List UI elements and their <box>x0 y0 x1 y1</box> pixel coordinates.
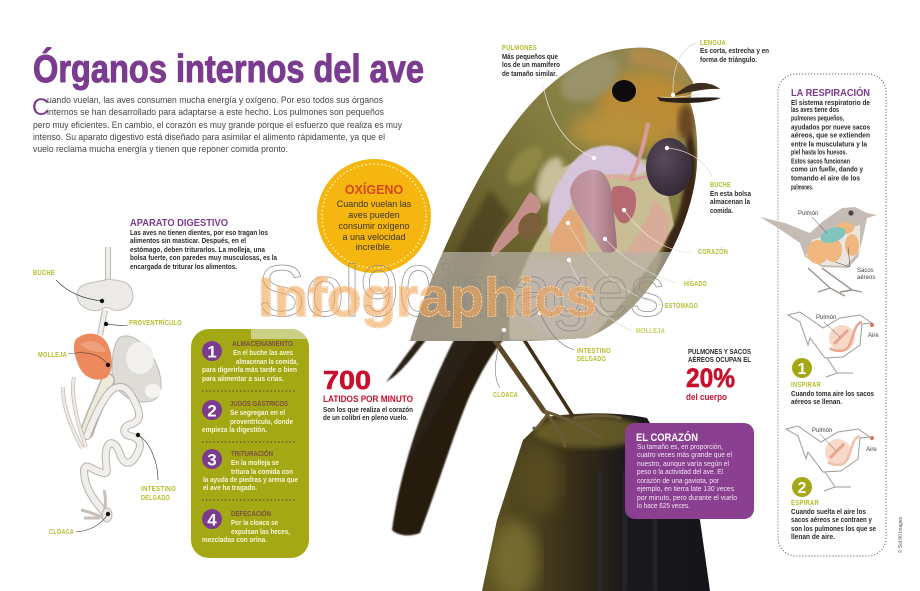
panel: la respiracion: entre la musculatura y la <box>791 140 868 148</box>
labels: MOLLEJA <box>38 352 67 359</box>
title: Órganos internos del ave <box>33 47 424 91</box>
step 4 <box>202 509 290 544</box>
panel: el corazon: cuatro veces más grande que el <box>637 450 732 459</box>
illustration: espirar diagram: Aire <box>866 447 877 453</box>
head and face colour <box>597 70 693 146</box>
step 2: empieza la digestión. <box>202 426 267 434</box>
left dark wing streaks <box>456 191 510 252</box>
intro text block: uando vuelan, las aves consumen mucha energía y oxígeno. Por eso todos sus órganos <box>47 95 383 106</box>
panel: el corazon: EL CORAZÓN <box>636 431 698 444</box>
stat: 20 percent: AÉREOS OCUPAN EL <box>688 355 751 364</box>
intro text block: vuelo reclama mucha energía y tienen que reponer comida pronto. <box>33 144 288 155</box>
step 3: tritura la comida con <box>231 468 293 476</box>
cavity background <box>509 150 674 340</box>
panel: el corazon: peso o la actividad del ave. El <box>637 467 723 476</box>
panel: la respiracion: ayudados por nueve sacos <box>791 122 870 132</box>
bird labels: En esta bolsa <box>710 189 752 198</box>
intro text block <box>32 94 402 155</box>
tree stump <box>480 410 715 591</box>
step 4: 4 <box>207 510 217 530</box>
panel: la respiracion: pulmones. <box>791 182 813 192</box>
stat: 700 latidos: Son los que realiza el corazón <box>323 405 413 414</box>
step 2: espirar <box>791 477 876 541</box>
aparato digestivo text: APARATO DIGESTIVO <box>130 217 228 229</box>
aparato digestivo text: bolsa fuerte, con paredes muy musculosas, es la <box>130 253 278 262</box>
step 1: para alimentar a sus crías. <box>202 375 284 383</box>
aparato digestivo text: Las aves no tienen dientes, por eso tragan los <box>130 228 268 237</box>
aparato digestivo text: encargada de triturar los alimentos. <box>130 262 237 271</box>
panel: el corazon <box>625 423 754 519</box>
beak <box>672 83 720 96</box>
panel: la respiracion: pulmones pequeños, <box>791 114 844 122</box>
bird labels: comida. <box>710 206 733 215</box>
bird tail <box>386 338 505 535</box>
panel: la respiracion <box>760 74 886 556</box>
bird labels: HÍGADO <box>684 279 707 288</box>
labels: CLOACA <box>49 529 74 536</box>
illustration: espirar diagram: Pulmón <box>812 428 832 434</box>
bird labels: CORAZÓN <box>698 247 728 256</box>
aparato digestivo text: estómago, deben triturarlos. La molleja, una <box>130 245 266 254</box>
step 1: almacenan la comida, <box>236 358 298 366</box>
panel: la respiracion: aéreos, que se extienden <box>791 130 870 140</box>
stat: 20 percent <box>686 347 751 403</box>
step 1: inspirar: 1 <box>798 361 807 378</box>
eye <box>612 80 636 102</box>
bird labels: ESTÓMAGO <box>665 301 698 310</box>
bird labels: PULMONES <box>502 45 537 52</box>
labels: PROVENTRÍCULO <box>129 318 182 327</box>
label lines and dots <box>56 280 158 532</box>
stat: 700 latidos: de un colibrí en pleno vuelo. <box>323 413 408 422</box>
bird labels: DELGADO <box>577 356 606 363</box>
step 2: espirar: sacos aéreos se contraen y <box>791 515 873 524</box>
callout: oxigeno: Cuando vuelan las <box>337 199 412 209</box>
stat: 700 latidos: LATIDOS POR MINUTO <box>323 394 413 404</box>
labels: BUCHE <box>33 270 55 277</box>
intro text block: internos se han desarrollado para adaptarse a este hecho. Los pulmones son pequeños <box>47 107 384 118</box>
panel: la respiracion: El sistema respiratorio de <box>791 98 870 107</box>
panel: el corazon: corazón de una gaviota, por <box>637 476 719 485</box>
watermark: Infographics <box>258 266 597 328</box>
panel: la respiracion: piel hasta los huesos. <box>791 148 847 156</box>
step 1: inspirar: INSPIRAR <box>791 382 821 389</box>
step 1: En el buche las aves <box>233 349 293 357</box>
bird labels <box>493 40 769 399</box>
grey watermark band <box>410 252 670 341</box>
breast edge <box>652 129 698 284</box>
step 2 <box>202 399 293 434</box>
bird labels: forma de triángulo. <box>700 55 757 64</box>
step 3: 3 <box>207 450 217 470</box>
callout: oxigeno: aves pueden <box>348 210 400 220</box>
callout: oxigeno <box>317 159 431 273</box>
panel: el corazon: nuestro, aunque varía según el <box>637 459 729 468</box>
intro text block: intenso. Su aparato digestivo está diseñado para asimilar el alimento rápidamente, ya que el <box>33 132 385 143</box>
bird labels: Más pequeños que <box>502 52 558 61</box>
stomach <box>570 170 617 254</box>
illustration: espirar diagram <box>786 426 877 491</box>
callout: oxigeno: OXÍGENO <box>345 182 403 197</box>
intro text block: pero muy eficientes. En cambio, el corazón es muy grande porque el esfuerzo que realiza es muy <box>33 120 402 131</box>
bird labels: Es corta, estrecha y en <box>700 46 769 55</box>
step 1: ALMACENAMIENTO <box>232 341 293 348</box>
step 1 <box>202 341 298 383</box>
callout: oxigeno: increíble. <box>356 242 392 252</box>
step 1: inspirar <box>791 358 874 406</box>
watermark: Sol90images <box>258 252 665 332</box>
step 3: la ayuda de piedras y arena que <box>203 476 298 484</box>
illustration: bird with air sacs: Pulmón <box>798 211 818 217</box>
bird labels: de tamaño similar. <box>502 69 557 78</box>
illustration: bird with air sacs: Sacos <box>857 268 874 274</box>
copyright: © Sol 90 Images <box>897 517 904 553</box>
crop <box>646 138 692 196</box>
bird labels: MOLLEJA <box>636 328 665 335</box>
callout: oxigeno: consumir oxígeno <box>338 221 410 231</box>
step 1: 1 <box>207 342 217 362</box>
bird labels: INTESTINO <box>577 348 611 355</box>
stat: 700 latidos: 700 <box>323 365 371 395</box>
bird labels: almacenan la <box>710 197 751 206</box>
step 3: el ave ha tragado. <box>203 484 257 492</box>
step 1: inspirar: Cuando toma aire los sacos <box>791 389 874 398</box>
bird body with cutaway organs <box>400 40 721 350</box>
aparato digestivo text: alimentos sin masticar. Después, en el <box>130 236 246 245</box>
illustration: inspirar diagram: Pulmón <box>816 315 836 321</box>
step 2: JUGOS GÁSTRICOS <box>230 399 288 408</box>
step 4: mezcladas con orina. <box>202 536 267 544</box>
stat: 700 latidos <box>323 365 413 422</box>
bird labels: BUCHE <box>710 182 731 189</box>
step 1: para digerirla más tarde o bien <box>202 366 297 374</box>
stat: 20 percent: 20% <box>686 363 735 393</box>
panel: la respiracion: LA RESPIRACIÓN <box>791 86 870 99</box>
step 2: 2 <box>207 402 217 420</box>
illustration: bird with air sacs <box>760 207 877 296</box>
illustration: inspirar diagram <box>788 312 879 377</box>
molleja organ <box>74 334 112 380</box>
aparato digestivo text <box>130 217 278 271</box>
intro text block: C <box>32 94 49 121</box>
panel: la respiracion: tomando el aire de los <box>791 174 860 182</box>
panel: la respiracion: como un fuelle, dando y <box>791 164 864 174</box>
panel: la respiracion: Estos sacos funcionan <box>791 156 850 166</box>
digestive system illustration <box>33 247 182 536</box>
bird labels: LENGUA <box>700 40 726 47</box>
illustration: inspirar diagram: Aire <box>868 333 879 339</box>
illustration: bird with air sacs: aéreos <box>857 275 875 281</box>
step 2: Se segregan en el <box>230 409 285 417</box>
step 3: En la molleja se <box>231 459 279 467</box>
step 4: DEFECACIÓN <box>231 509 271 518</box>
stat: 20 percent: del cuerpo <box>686 392 727 403</box>
step 2: proventrículo, donde <box>230 418 293 426</box>
step 2: espirar: 2 <box>798 480 807 497</box>
panel: digestion steps <box>191 329 309 558</box>
bird labels: los de un mamífero <box>502 60 560 69</box>
step 2: espirar: llenan de aire. <box>791 532 835 541</box>
watermark: Infographics <box>258 266 597 328</box>
panel: el corazon: por minuto, pero durante el vuelo <box>637 493 737 502</box>
panel: el corazon: Su tamaño es, en proporción, <box>637 442 723 451</box>
step 3: TRITURACIÓN <box>231 449 273 458</box>
intestine <box>550 210 587 256</box>
step 2: espirar: ESPIRAR <box>791 500 819 507</box>
step 4: expulsan las heces, <box>231 528 290 536</box>
hind organ <box>491 192 541 256</box>
panel: el corazon: lo hace 625 veces. <box>637 501 690 510</box>
panel: el corazon: ejemplo, en tierra late 130 veces <box>637 484 734 493</box>
step 4: Por la cloaca se <box>231 519 278 527</box>
bird labels: CLOACA <box>493 392 518 399</box>
labels <box>33 270 182 536</box>
step 2: espirar: Cuando suelta el aire los <box>791 507 866 516</box>
labels: INTESTINO <box>141 486 176 493</box>
heart <box>612 186 636 223</box>
panel: la respiracion: las aves tiene dos <box>791 105 839 114</box>
step 3 <box>202 449 298 492</box>
bird label leader lines <box>495 43 712 388</box>
stat: 20 percent: PULMONES Y SACOS <box>688 347 751 356</box>
lungs <box>548 146 647 236</box>
step 2: espirar: son los pulmones los que se <box>791 524 876 533</box>
callout: oxigeno: a una velocidad <box>342 232 406 242</box>
step 1: inspirar: aéreos se llenan. <box>791 397 842 406</box>
bird legs <box>493 338 620 446</box>
labels: DELGADO <box>141 495 170 502</box>
liver <box>624 200 670 252</box>
